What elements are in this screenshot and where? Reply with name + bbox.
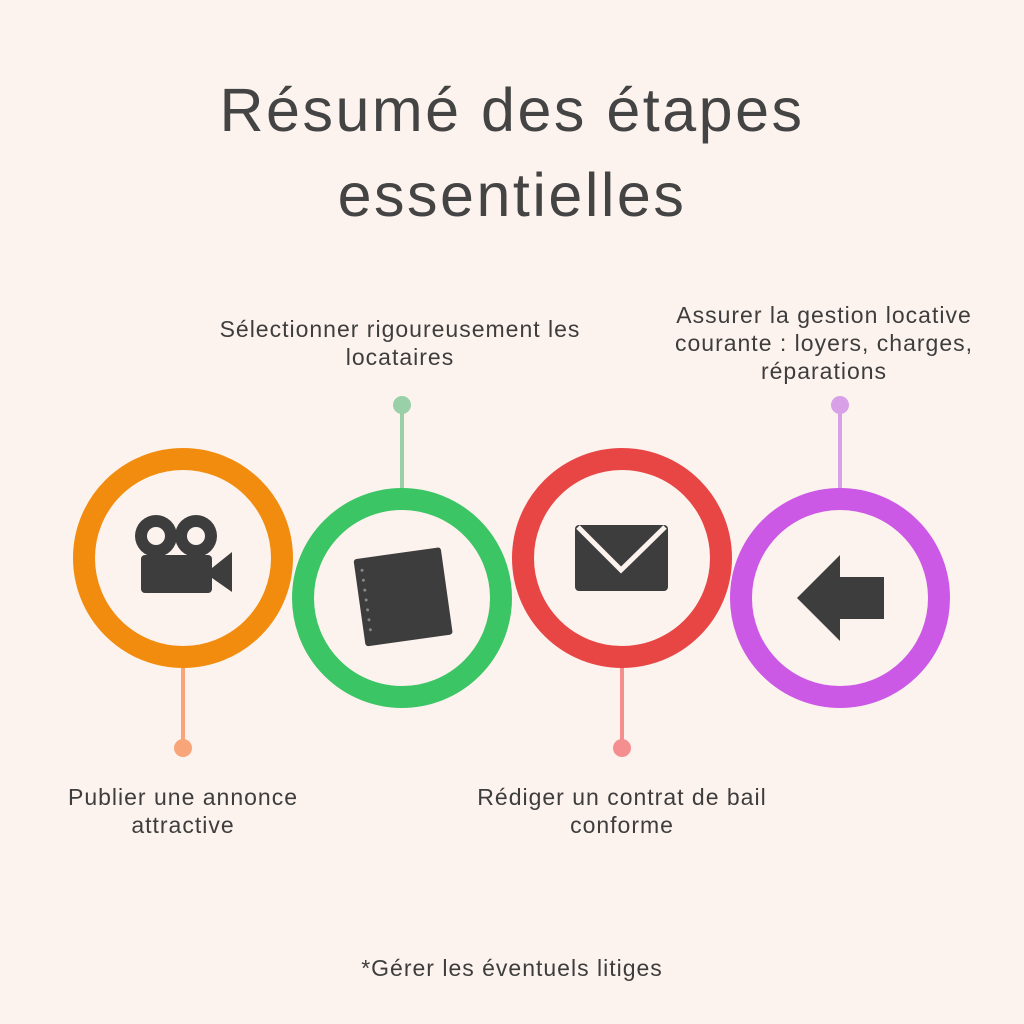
text: step 2: Sélectionner rigoureusement les: [220, 316, 580, 342]
text: step 1: Publier une annonce: [68, 784, 298, 810]
circle: orange: [84, 459, 282, 657]
connector: step 4: [831, 396, 849, 490]
text: step 2: [220, 316, 580, 370]
connector: step 2: [393, 396, 411, 500]
title: [219, 76, 805, 229]
text: step 3: conforme: [570, 812, 674, 838]
circle: purple: [741, 499, 939, 697]
text: step 4: Assurer la gestion locative: [676, 302, 972, 328]
title: Résumé des étapes: [219, 76, 805, 144]
connector: step 3: [613, 655, 631, 757]
text: step 4: réparations: [761, 358, 887, 384]
text: step 2: locataires: [346, 344, 454, 370]
icon: notebook: [353, 547, 453, 647]
text: step 1: attractive: [131, 812, 235, 838]
text: step 3: Rédiger un contrat de bail: [477, 784, 767, 810]
text: step 3: [477, 784, 767, 838]
circle: red: [523, 459, 721, 657]
icon: video camera: [135, 515, 232, 593]
connector: step 1: [174, 655, 192, 757]
footer note: *Gérer les éventuels litiges: [361, 955, 663, 981]
circle: green: [303, 499, 501, 697]
icon: arrow left: [797, 555, 884, 641]
title: essentielles: [338, 161, 686, 229]
text: step 4: courante : loyers, charges,: [675, 330, 973, 356]
icon: envelope: [575, 525, 668, 591]
text: step 1: [68, 784, 298, 838]
text: step 4: [675, 302, 973, 384]
